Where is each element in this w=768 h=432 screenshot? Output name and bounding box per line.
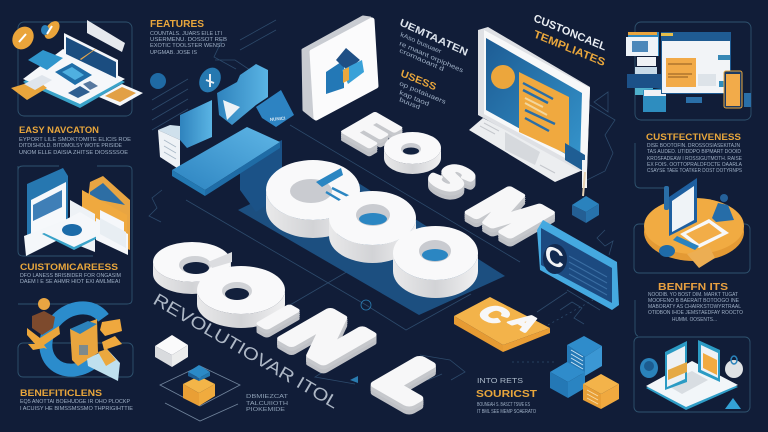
blue C card: C [545, 239, 564, 275]
text: cost effectiveness body: KROSFADEAW I ROSSIGUTMOTH. RAISE [647, 156, 742, 162]
ring: coin C [153, 242, 232, 294]
panel: book illustration [634, 337, 750, 412]
text: benefits left body: I ACUISY HE BIMSSMSSMO THPRIGIHTTIE [20, 406, 133, 412]
text: cost effectiveness body [635, 143, 742, 188]
letter: I: I [248, 301, 306, 334]
text: benefits right body: MABORATY AS CHAIRKSTOWYRTRAAL [648, 304, 741, 310]
text: uemtaaten body: cromaoant d [398, 47, 445, 73]
text: easy navigation body: EYPORT LILE SMOKTOMITE ELICIS ROE [19, 137, 131, 143]
heading: customizable templates: TEMPLIATES [532, 28, 607, 69]
heading: sourcist: SOURICST [476, 388, 538, 400]
orange button [491, 65, 515, 89]
heading: benefits left: BENEFITICLENS [20, 388, 103, 399]
letter: M: M [452, 179, 567, 246]
text: sourcist body [477, 402, 536, 415]
open book [646, 363, 738, 410]
text: easy navigation body: DITDISHOLD. BITDMOLSY WOTE PRISIDE [19, 143, 122, 149]
standing pages [665, 341, 687, 390]
orange folder [84, 176, 130, 250]
heading: features: FEATURES [150, 18, 204, 30]
orange CA tile: C [470, 301, 517, 328]
ring: coin O [197, 266, 285, 328]
panel: easy navigation illustration [8, 18, 143, 116]
text: uses body: buusd [398, 96, 421, 111]
small blue card [565, 143, 585, 172]
heading: customizable templates [532, 12, 608, 69]
heading: easy navigation: EASY NAVCATON [19, 125, 99, 136]
text: cost effectiveness body: CSAYSE TAEE TOATKER DOST DOTYRNPS [647, 168, 742, 174]
text: small caption center: TALCUIIOTH [246, 401, 288, 407]
big 3D monitor [469, 27, 590, 188]
tall blue folder [180, 100, 212, 148]
text: benefits right body: MOOFENO B BAERAIT BOTOOGO INE [648, 298, 739, 304]
text: features body: EXOTIC TOOLSTER WENSO [150, 43, 226, 49]
panel: customization illustration [18, 166, 132, 304]
text: easy navigation body [19, 137, 131, 156]
text: benefits right body: OTIDBON IHOE JEMSTAEDFAY ROOCTO [648, 310, 744, 316]
document box [70, 319, 98, 366]
text: cost effectiveness body: TAS AUDED. UTIDDPO BIPMART DOOID [647, 149, 741, 155]
text: features body: UPGMAB. JOSE IS [150, 50, 197, 56]
orange CA tile [454, 297, 550, 352]
text: customization body [20, 273, 121, 285]
light blue box [28, 50, 63, 70]
tablet [669, 178, 697, 236]
connector lines [149, 20, 615, 384]
text: small caption center [246, 394, 289, 413]
text: benefits right body: HUMM. OOSENTS... [672, 317, 717, 323]
screens [628, 32, 659, 56]
text: uemtaaten body [398, 31, 464, 74]
icon: white cube [155, 335, 188, 367]
letter: S: S [416, 157, 488, 198]
panel: customer effectiveness screens [626, 22, 751, 120]
text: benefits right body: NOODIB. YO BOST DIM. MARKT TUGAT [648, 292, 738, 298]
white base [42, 214, 110, 250]
text: benefits left body [20, 399, 133, 412]
letter: L: L [361, 350, 466, 411]
text: small caption center: DBMIEZCAT [246, 394, 289, 400]
text: features body [150, 31, 227, 56]
text: uses body [398, 80, 447, 111]
letter: E: E [331, 107, 411, 153]
blue isometric blocks: NUNICI [270, 116, 286, 122]
person [720, 194, 728, 202]
small blue tag [256, 90, 294, 127]
icon: triangle [725, 398, 741, 409]
blue isometric blocks [150, 64, 294, 212]
icon: stacked cubes [550, 336, 619, 409]
text: uses body: kap taod [398, 89, 431, 108]
heading: cost effectiveness: CUSTFECTIVENESS [646, 132, 741, 142]
text: benefits right body [635, 292, 744, 336]
phone [724, 71, 742, 108]
ring: back C [266, 160, 360, 238]
text: features body: USERMENU. DOSSOT REB [150, 37, 227, 43]
text: sourcist body: IT BML SEE MEMP SOAERATO [477, 409, 536, 415]
wide slab [172, 127, 280, 190]
orange stacks [100, 319, 122, 336]
text: sourcist body: BOUNEAH S. BASCT TSWE ES [477, 402, 530, 408]
letter: N: N [263, 300, 390, 373]
text: features body: COUNTALS. JUARS EILE LTI [150, 31, 222, 37]
heading: uemtaaten: UEMTAATEN [398, 18, 469, 59]
text: benefits left body: EQ5 ANOTTAI BOEHUDGE IR OHO PLOCKP [20, 399, 130, 405]
panel: benefits illustration [18, 295, 133, 383]
monitor frame [478, 27, 590, 172]
text: cost effectiveness body: DISE BOOTOFIN. DROSSOSIASEKITAJN [647, 143, 740, 149]
icons: floating blue tags [150, 73, 166, 89]
text: uses body: op potaiuaers [398, 80, 447, 106]
white document block [158, 125, 190, 140]
map tiles [68, 86, 90, 98]
icon: stacked cubes on diamond [160, 365, 240, 421]
icon: blue circular arrow [33, 295, 121, 383]
white paper [70, 200, 95, 252]
heading: uses: USESS [399, 69, 438, 93]
text: small caption center: PIOKEMIDE [246, 407, 285, 413]
upper blue folder [217, 64, 268, 125]
blue dashboard tile [55, 63, 92, 85]
panel: benefits orange platform [634, 178, 750, 273]
orange document [519, 72, 569, 155]
icon: person [27, 298, 60, 350]
text: into rets: INTO RETS [477, 378, 523, 385]
text: cost effectiveness body: EX FOIS. OOTTOPRALDFOCTE OAARLA [647, 162, 742, 168]
orange CA tile: A [503, 309, 547, 335]
text: customization body: DAEM I E SE AHMR HIOT EXI AMLMEAI [20, 279, 120, 285]
icon: floating white card [87, 20, 125, 52]
heading: benefits right: BENFFN ITS [658, 282, 728, 293]
small box near monitor [572, 172, 599, 223]
text: easy navigation body: UNOM ELLE DAISIA ZHITSE DIOSSSSOE [19, 150, 128, 156]
icon: orange balloons [8, 18, 63, 54]
blue roller [659, 245, 675, 257]
ring: top O [384, 132, 441, 174]
icon: clock [640, 358, 658, 378]
book page [87, 349, 120, 381]
text: uemtaaten body: re maant orpiphees [398, 40, 464, 74]
heading: customizable templates: CUSTONCAEL [532, 12, 608, 54]
ring: front O [393, 226, 478, 298]
blue C card [537, 220, 619, 310]
heading: customization: CUISTOMICAREESS [20, 262, 118, 272]
laptop base [23, 52, 125, 108]
orange pad [11, 80, 47, 100]
orange card [99, 84, 143, 106]
text: uemtaaten body: kAso busuaer [399, 31, 443, 56]
icon: lock [725, 360, 743, 378]
lower blue tower [240, 140, 282, 212]
ring: middle O [329, 191, 416, 263]
text: revolutionary tool: REVOLUTIOVAR ITOL [150, 289, 343, 413]
monitor foot [469, 118, 583, 182]
laptop screen [64, 33, 118, 82]
text: customization body: DFO LANESS BRISBIDER FOR ONGASIM [20, 273, 121, 279]
icon: white app tile [303, 17, 376, 118]
dark blue platform [238, 165, 505, 315]
blue folder [27, 168, 68, 236]
